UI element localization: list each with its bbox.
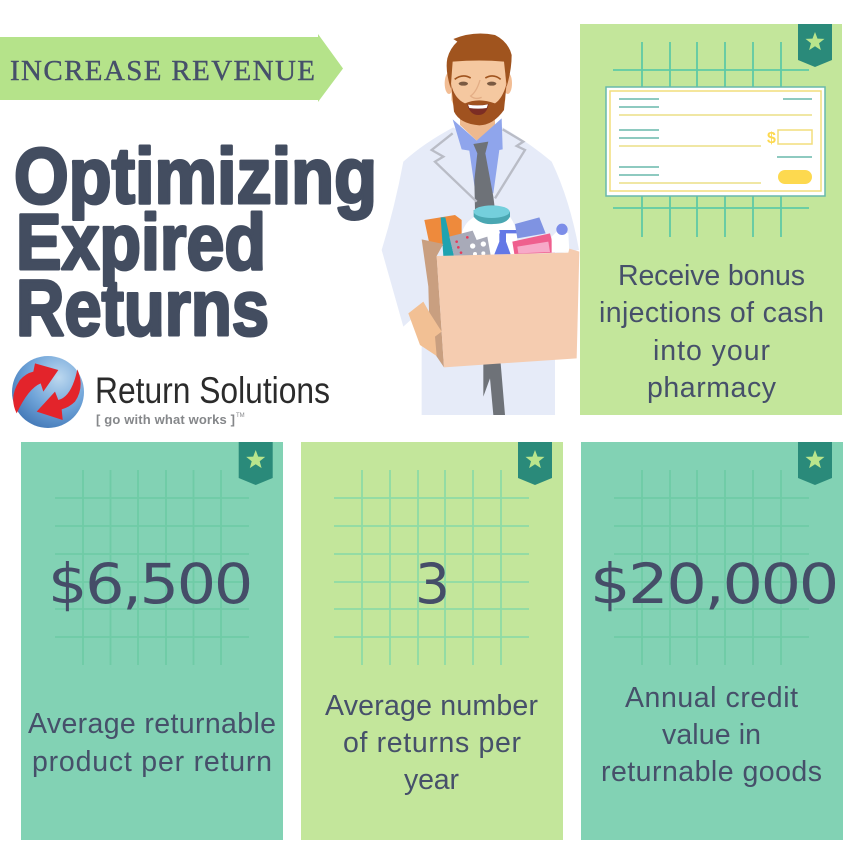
title: Optimizing	[14, 131, 377, 220]
figure: 3	[415, 552, 448, 616]
caption: of returns per	[343, 727, 522, 759]
tie	[473, 142, 505, 415]
ribbon badge	[518, 442, 552, 485]
coat lapels	[432, 129, 525, 202]
brows	[455, 76, 501, 79]
illustration: pharmacist holding box of medicine	[382, 34, 579, 415]
ribbon badge	[798, 24, 832, 67]
box	[422, 239, 579, 367]
shirt	[453, 118, 503, 193]
bottle cap	[474, 205, 510, 224]
logo: Return Solutions	[12, 356, 330, 428]
grid	[55, 470, 249, 665]
wordmark: Return Solutions	[95, 370, 330, 411]
eyes	[459, 82, 496, 86]
bank check: $	[767, 130, 776, 147]
blister packs	[449, 231, 491, 256]
panel: annual credit value	[581, 442, 843, 840]
caption: Average returnable	[28, 708, 276, 740]
figure: $20,000	[590, 552, 837, 616]
caption: product per return	[32, 746, 272, 778]
lab coat	[382, 127, 579, 415]
hair	[447, 34, 512, 88]
caption	[325, 690, 538, 796]
ribbon badge	[239, 442, 273, 485]
caption: returnable goods	[601, 756, 822, 788]
red arrows	[13, 363, 81, 420]
head	[445, 34, 512, 125]
medicine items	[424, 205, 569, 256]
panel: check card	[580, 24, 842, 415]
beard	[451, 83, 507, 125]
caption: year	[404, 764, 460, 796]
grid	[334, 470, 529, 665]
panel: average returnable product	[21, 442, 283, 840]
caption: into your	[653, 335, 770, 367]
caption: injections of cash	[599, 297, 824, 329]
nose	[471, 80, 482, 98]
globe	[12, 356, 84, 428]
caption	[599, 260, 824, 404]
white bottle	[462, 217, 517, 255]
grid	[614, 470, 809, 665]
logo: Return Solutions: TM	[236, 413, 245, 419]
title: Returns	[16, 263, 269, 352]
caption: Average number	[325, 690, 538, 722]
tagline: [ go with what works ]	[96, 412, 235, 427]
title	[14, 131, 377, 352]
panel: number of returns	[301, 442, 563, 840]
mouth	[467, 104, 489, 115]
grid	[613, 42, 809, 237]
caption: Annual credit	[625, 682, 798, 714]
neck	[460, 110, 495, 141]
banner text: INCREASE REVENUE	[10, 55, 315, 87]
ribbon badge	[798, 442, 832, 485]
title: Expired	[16, 197, 266, 286]
caption: Receive bonus	[618, 260, 805, 292]
banner: increase revenue	[0, 34, 343, 102]
caption: value in	[662, 719, 761, 751]
caption	[601, 682, 822, 788]
bank check	[606, 87, 825, 196]
caption: pharmacy	[647, 372, 777, 404]
figure: $6,500	[48, 552, 251, 616]
hand	[408, 302, 442, 356]
caption	[28, 708, 276, 778]
